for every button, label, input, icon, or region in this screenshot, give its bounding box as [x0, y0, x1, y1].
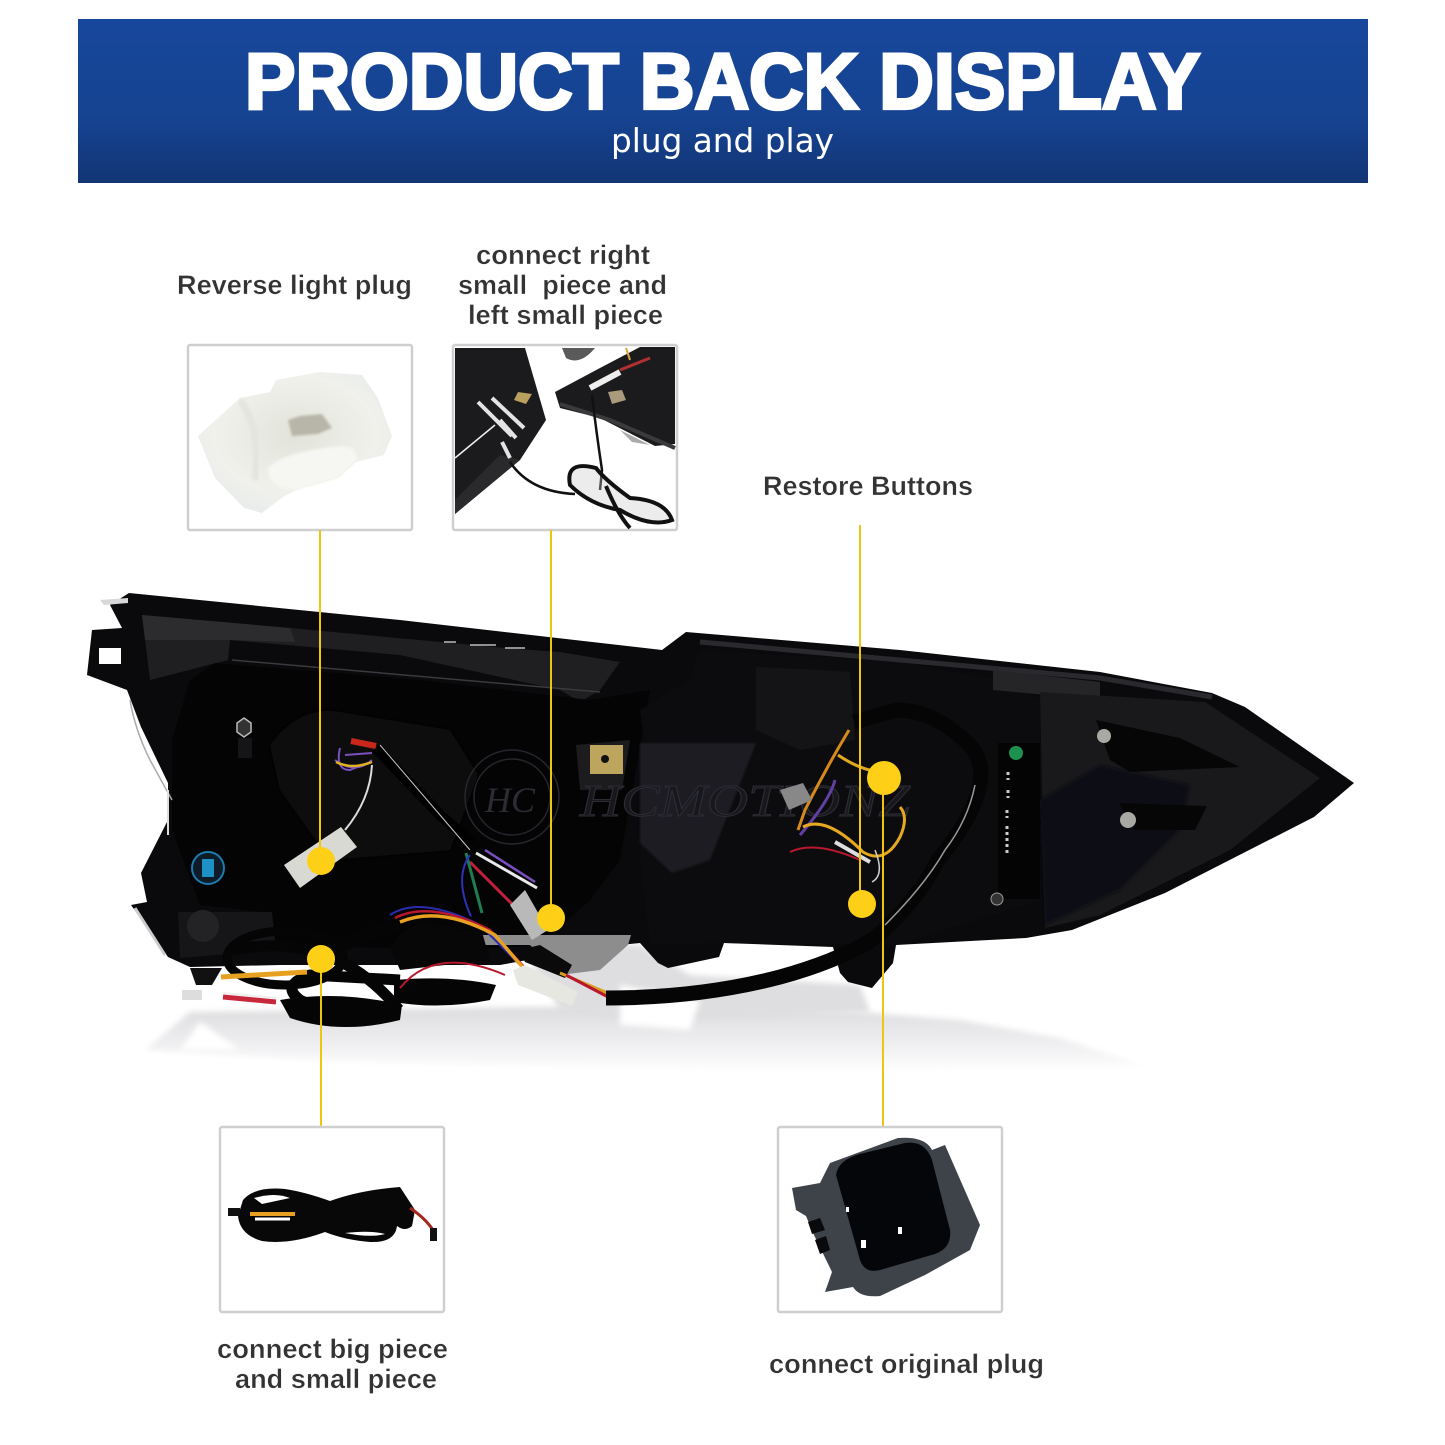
- main harness cable: [606, 710, 981, 998]
- bolts: [1097, 729, 1136, 828]
- marker dots: [307, 761, 901, 973]
- thumbnail: wire harness: [220, 1127, 444, 1312]
- label: connect right and left small piece: connect right: [476, 240, 650, 270]
- upper trim bands: [142, 615, 620, 702]
- white plug with wires: [284, 741, 537, 925]
- tail lamp back view: HC: [484, 780, 536, 820]
- gold bracket: [576, 740, 630, 790]
- centre housing: [640, 650, 1040, 945]
- right wing interior: [1040, 692, 1320, 928]
- orange and coloured wire loop: [780, 730, 904, 882]
- title: PRODUCT BACK DISPLAY: [245, 38, 1200, 126]
- screw: [237, 718, 252, 758]
- left edge highlights: [130, 700, 172, 800]
- dark strip with markings: [991, 743, 1040, 905]
- grey tray under connector: [466, 935, 631, 975]
- subtitle: plug and play: [611, 121, 834, 160]
- thumbnail: reverse light plug: [188, 345, 412, 530]
- main dark panel: [172, 663, 650, 950]
- banner: [78, 19, 1368, 183]
- label: connect big piece and small piece: connect big piece: [217, 1334, 448, 1364]
- blue vent icon: [192, 852, 224, 884]
- tail lamp back view: [87, 593, 1354, 1027]
- wiring harness bundle: [221, 907, 525, 1027]
- mounting tab hole: [99, 648, 121, 664]
- label: connect right and left small piece: [458, 240, 667, 330]
- label: connect original plug: connect original plug: [769, 1349, 1044, 1379]
- label: reverse light plug: Reverse light plug: [177, 270, 412, 300]
- leader lines: [320, 525, 883, 1126]
- label: connect big piece and small piece: and small piece: [235, 1364, 437, 1394]
- lamp reflection: [145, 945, 1145, 1072]
- watermark: [465, 750, 559, 844]
- connector pieces: [510, 890, 548, 940]
- label: connect right and left small piece: small piece and: [458, 270, 667, 300]
- label: restore buttons: Restore Buttons: [763, 471, 973, 501]
- thumbnail: connecting small pieces: [453, 345, 677, 530]
- lamp body silhouette: [87, 593, 1354, 988]
- tail lamp back view: HCMOTIONZ: [579, 775, 911, 826]
- thumbnail: original plug connector: [778, 1127, 1002, 1312]
- label: connect right and left small piece: left small piece: [468, 300, 663, 330]
- label: connect big piece and small piece: [217, 1334, 448, 1394]
